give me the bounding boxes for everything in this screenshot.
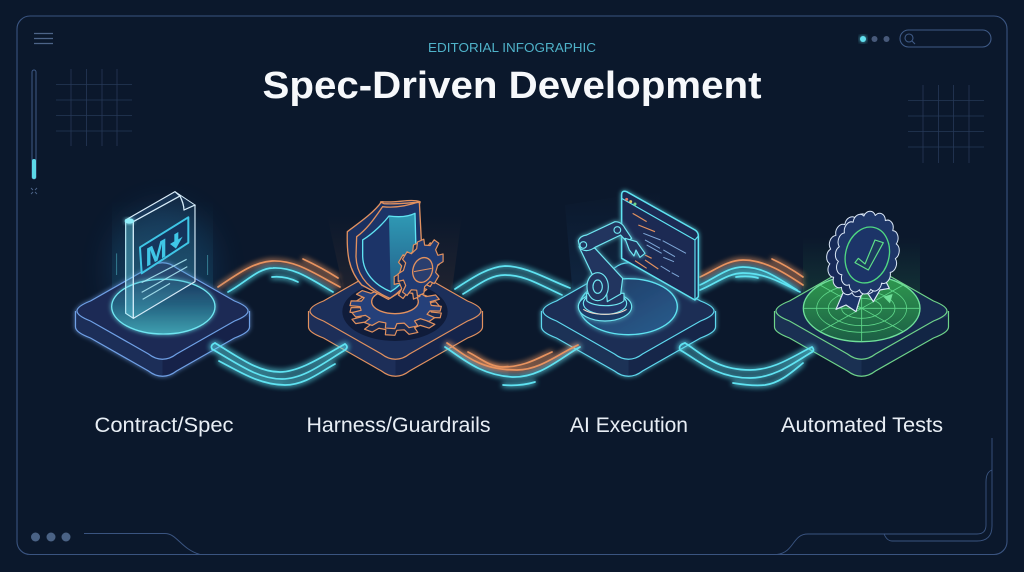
platform 1 — [76, 263, 250, 376]
station 1: contract/spec — [76, 192, 250, 376]
label: AI execution: AI Execution — [570, 414, 688, 437]
platform 2 — [308, 263, 482, 376]
vertical progress slider — [31, 70, 37, 194]
label: contract/spec: Contract/Spec — [94, 414, 234, 437]
hamburger menu icon — [34, 34, 53, 44]
icon: markdown document on glowing disc: M — [145, 232, 167, 273]
check mark — [855, 240, 883, 270]
code window — [622, 191, 698, 300]
connectors: lower links in front of the platforms — [211, 343, 813, 385]
robot arm — [578, 222, 645, 321]
markdown badge — [140, 217, 188, 273]
footer dots — [31, 532, 70, 542]
label: automated tests: Automated Tests — [781, 414, 943, 437]
small gear — [394, 234, 439, 308]
base gear — [345, 288, 446, 338]
station 2: harness/guardrails — [308, 200, 482, 376]
decorative grid top right — [908, 85, 984, 163]
label: harness/guardrails: Harness/Guardrails — [306, 414, 490, 437]
rosette — [820, 208, 900, 302]
connectors: upper links behind the platforms — [218, 259, 803, 295]
eyebrow: EDITORIAL INFOGRAPHIC — [428, 40, 596, 55]
icon: radar disc with badge — [803, 206, 920, 342]
station 3: AI execution — [542, 190, 716, 376]
decorative grid top left — [56, 69, 132, 146]
status dots — [860, 36, 890, 42]
icon: shield and gears — [342, 200, 448, 341]
radar — [803, 275, 920, 342]
icon: robot arm and code window — [578, 191, 698, 335]
shield — [347, 200, 420, 299]
ribbons — [836, 288, 862, 312]
platform 4 — [774, 263, 948, 376]
platform 3 — [542, 263, 716, 376]
station 4: automated tests — [774, 206, 948, 376]
icon: markdown document on glowing disc — [112, 192, 215, 334]
search box — [900, 30, 991, 47]
title: Spec-Driven Development — [262, 65, 762, 107]
